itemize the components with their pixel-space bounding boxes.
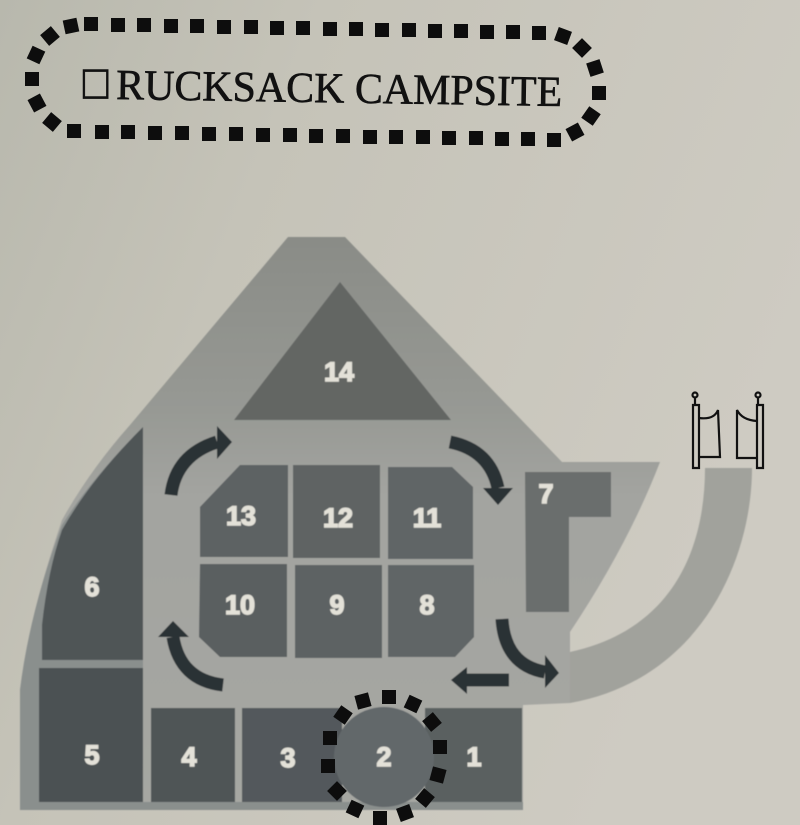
pitch 1 xyxy=(425,708,522,802)
campsite map xyxy=(20,237,752,810)
pitch 10: 10 xyxy=(225,590,255,620)
pitch 8 xyxy=(388,565,474,657)
pitch 4: 4 xyxy=(181,742,197,772)
highlight ring around pitch 2 xyxy=(321,690,447,825)
site ground xyxy=(20,237,660,810)
right gate post xyxy=(737,392,763,468)
pitch 1: 1 xyxy=(466,742,482,772)
pitch 14 xyxy=(234,282,451,420)
title badge xyxy=(25,17,606,147)
arrow top-left xyxy=(171,426,232,495)
access road xyxy=(570,468,752,703)
left gate post xyxy=(692,392,720,468)
arrow bottom-right xyxy=(502,619,559,688)
pitch 11 xyxy=(388,467,473,559)
arrow bottom-left xyxy=(158,621,223,685)
pitch 7 xyxy=(525,472,611,612)
dotted title border xyxy=(25,17,606,147)
pitch 3: 3 xyxy=(280,743,296,773)
pitch 12: 12 xyxy=(323,503,353,533)
pitch 11: 11 xyxy=(413,503,441,533)
pitch 9 xyxy=(295,565,382,658)
left ground strip xyxy=(20,427,523,810)
pitch 4 xyxy=(151,708,235,802)
pitch 2 highlighted xyxy=(334,707,434,807)
pitch 6: 6 xyxy=(84,572,100,602)
pitch 13 xyxy=(200,465,288,557)
pitch 7: 7 xyxy=(538,479,554,509)
pitch 5 xyxy=(39,668,143,802)
pitch 6 xyxy=(42,427,143,660)
arrow top-right xyxy=(450,442,513,505)
pitch 14: 14 xyxy=(324,357,354,387)
pitch 5: 5 xyxy=(84,740,100,770)
pitch 8: 8 xyxy=(419,590,435,620)
pitch 2 highlighted: 2 xyxy=(376,742,392,772)
title checkbox: □ xyxy=(80,60,111,104)
icon: entrance gate xyxy=(692,392,763,468)
pitch 9: 9 xyxy=(329,590,345,620)
title text: RUCKSACK CAMPSITE xyxy=(116,62,563,116)
pitch 3 xyxy=(242,708,342,802)
arrow left straight xyxy=(451,667,509,694)
pitch 12 xyxy=(293,465,380,558)
pitch 10 xyxy=(199,564,287,657)
pitch 13: 13 xyxy=(226,501,256,531)
